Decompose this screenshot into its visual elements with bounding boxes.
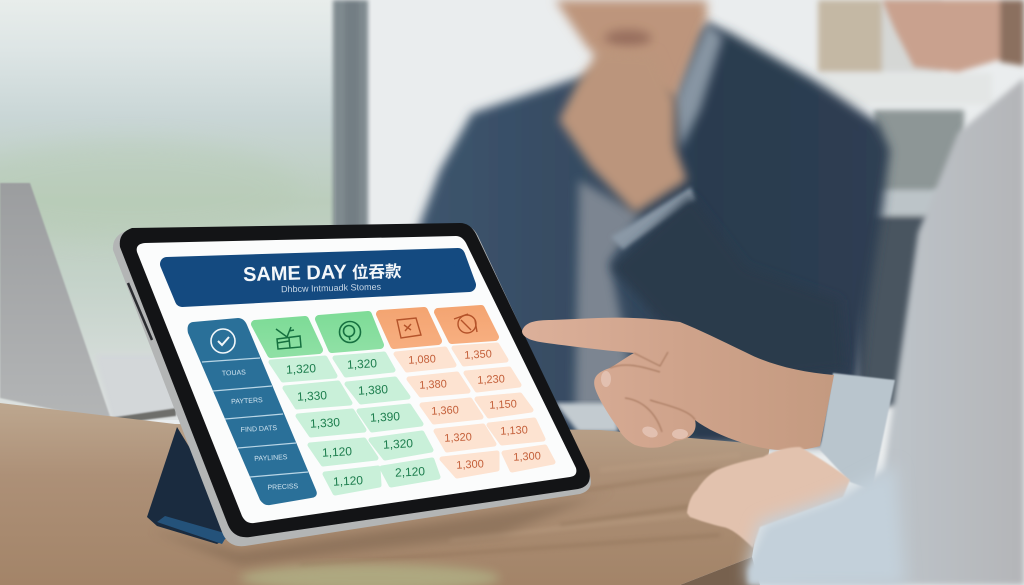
- orange values: 1,230: [477, 373, 505, 387]
- wooden table: [0, 403, 770, 585]
- window frame column: [333, 0, 368, 240]
- green values: 1,320: [383, 436, 414, 452]
- tablet shadow: [150, 490, 615, 565]
- light object behind tablet: [555, 403, 618, 432]
- banner subtitle: Dhbcw Intmuadk Stomes: [281, 282, 382, 294]
- green reflection: [240, 564, 500, 585]
- icon: check circle: [211, 329, 235, 353]
- resting hand: [687, 447, 850, 548]
- green values: [286, 356, 426, 489]
- shirt cuff: [820, 373, 895, 490]
- shirt body: [748, 78, 1024, 585]
- orange cells: [396, 345, 553, 476]
- green values: 1,120: [322, 444, 353, 460]
- banner title: SAME DAY 位吞款: [243, 260, 402, 286]
- green values: 1,330: [297, 388, 328, 404]
- green values: 1,330: [310, 415, 341, 431]
- orange header 2: [438, 309, 495, 340]
- white screen: [137, 236, 576, 523]
- tablet stand: [147, 427, 240, 544]
- shelves at right: [818, 0, 992, 406]
- green values: 1,320: [286, 361, 317, 377]
- orange values: 1,360: [431, 404, 459, 418]
- suit jacket: [415, 23, 890, 445]
- wood grain: [300, 455, 740, 565]
- laptop: [0, 183, 178, 424]
- silver rim: [113, 224, 591, 546]
- orange header 1: [380, 311, 438, 345]
- green values: 1,320: [347, 356, 378, 372]
- row labels: PRECISS: [267, 483, 299, 492]
- orange values: 1,080: [408, 353, 436, 367]
- shirt sleeve over hand: [748, 465, 905, 585]
- green values: 1,380: [358, 382, 389, 398]
- green cells: [271, 354, 438, 493]
- row dividers: [202, 358, 308, 477]
- green header 2: [319, 315, 380, 349]
- green header 1: [255, 320, 319, 354]
- row labels: TOUAS: [222, 369, 246, 378]
- orange columns: [380, 309, 553, 476]
- hand on chin: [559, 50, 687, 213]
- orange values: [408, 348, 541, 472]
- row labels: FIND DATS: [241, 425, 278, 434]
- row labels: PAYLINES: [254, 454, 288, 463]
- table column: blue labels: [188, 318, 317, 505]
- orange values: 1,150: [489, 398, 517, 412]
- face and neck: [555, 0, 707, 100]
- tablet: [113, 223, 591, 546]
- face and hair: [882, 0, 1024, 72]
- black bezel: [120, 223, 590, 537]
- pointing hand: [522, 318, 834, 450]
- finger creases: [610, 352, 695, 432]
- side button: [128, 283, 152, 340]
- green values: 2,120: [395, 464, 426, 480]
- row labels: [222, 369, 299, 492]
- row labels: PAYTERS: [231, 397, 263, 406]
- green values: 1,390: [370, 409, 401, 425]
- orange values: 1,380: [419, 378, 447, 392]
- orange values: 1,130: [500, 424, 528, 438]
- orange values: 1,350: [464, 348, 492, 362]
- orange values: 1,300: [513, 450, 541, 464]
- orange values: 1,300: [456, 458, 484, 472]
- woman in grey shirt: [522, 0, 1024, 585]
- orange values: 1,320: [444, 431, 472, 445]
- fingernails: [601, 371, 688, 439]
- window with blurred greenery: [0, 0, 335, 420]
- header banner: [167, 255, 469, 300]
- shirt cuff: [611, 187, 695, 250]
- green columns: [255, 315, 438, 493]
- green values: 1,120: [333, 473, 364, 489]
- man in dark suit: [415, 0, 890, 445]
- collar and shirt: [575, 22, 723, 410]
- jacket sleeve: [611, 195, 845, 380]
